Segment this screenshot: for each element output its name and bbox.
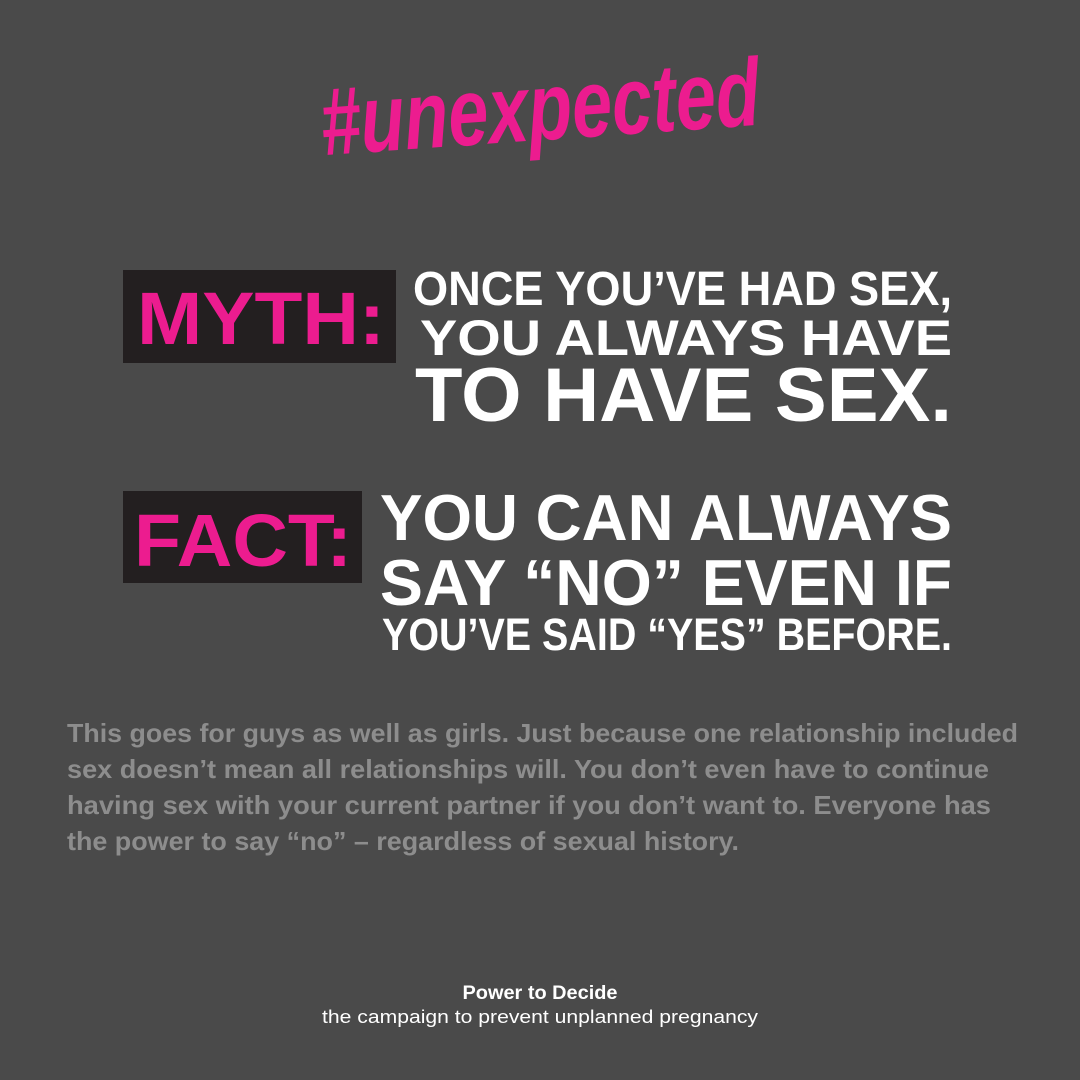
myth statement: TO HAVE SEX. — [415, 353, 952, 438]
myth statement: YOU ALWAYS HAVE — [420, 310, 952, 366]
explanation paragraph: sex doesn’t mean all relationships will. You don’t even have to continue — [67, 754, 989, 784]
title: #unexpected: #unexpected — [317, 39, 765, 176]
fact label box: FACT: — [134, 499, 352, 582]
fact statement — [380, 481, 952, 660]
explanation paragraph — [67, 718, 1018, 856]
footer: Power to Decide — [322, 983, 758, 1027]
footer: Power to Decide: Power to Decide — [462, 983, 618, 1004]
fact statement: YOU CAN ALWAYS — [380, 481, 952, 554]
fact statement: SAY “NO” EVEN IF — [380, 546, 952, 619]
explanation paragraph: having sex with your current partner if you don’t want to. Everyone has — [67, 790, 991, 820]
footer: Power to Decide: the campaign to prevent unplanned pregnancy — [322, 1007, 758, 1027]
explanation paragraph: This goes for guys as well as girls. Just because one relationship included — [67, 718, 1018, 748]
myth label box: MYTH: — [137, 277, 385, 360]
myth statement — [413, 263, 952, 438]
fact statement: YOU’VE SAID “YES” BEFORE. — [382, 609, 952, 660]
myth statement: ONCE YOU’VE HAD SEX, — [413, 263, 952, 316]
explanation paragraph: the power to say “no” – regardless of sexual history. — [67, 826, 739, 856]
